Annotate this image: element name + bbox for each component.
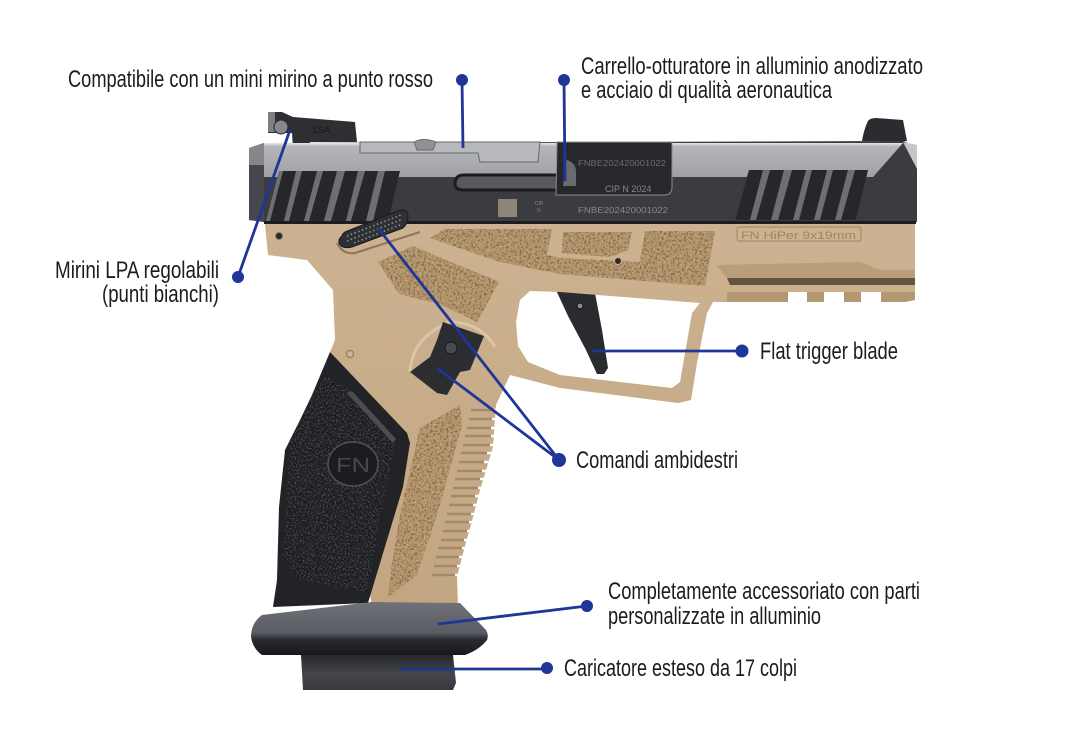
callout: slide <box>558 53 923 181</box>
rear sight: LSA <box>313 125 330 135</box>
rear sight <box>268 112 357 148</box>
callout: accessories: personalizzate in alluminio <box>608 603 821 630</box>
FN logo: FN <box>336 455 370 477</box>
magazine base plate <box>251 602 488 655</box>
slide <box>249 140 917 224</box>
backstrap grip panel <box>273 352 410 607</box>
pistol model marking: FN HiPer 9x19mm <box>741 230 856 242</box>
slide markings <box>498 159 669 217</box>
frame and grip <box>265 224 915 606</box>
callout: slide: e acciaio di qualità aeronautica <box>581 77 832 104</box>
illustration: pistol <box>249 112 917 690</box>
callout: red dot <box>68 66 468 148</box>
front slide serrations <box>735 170 868 220</box>
slide markings: N <box>537 208 541 214</box>
FN logo <box>328 442 378 486</box>
magazine <box>301 655 456 690</box>
callout: accessories <box>438 578 920 630</box>
thumb safety <box>410 322 495 395</box>
callout: sights: (punti bianchi) <box>102 281 219 308</box>
callout: accessories: Completamente accessoriato con parti <box>608 578 920 605</box>
frame rivets <box>276 232 622 264</box>
callout: magazine <box>399 655 797 682</box>
callout: magazine: Caricatore esteso da 17 colpi <box>564 655 797 682</box>
callout: red dot: Compatibile con un mini mirino a punto rosso <box>68 66 433 93</box>
slide markings: CIP <box>535 201 544 207</box>
callout: slide: Carrello-otturatore in alluminio anodizzato <box>581 53 923 80</box>
callout: trigger <box>592 338 898 365</box>
callout: sights <box>55 130 290 308</box>
frame rivet over texture <box>614 258 622 264</box>
callout: ambidextrous controls <box>378 228 738 474</box>
callout: trigger: Flat trigger blade <box>760 338 898 365</box>
slide markings: FNBE202420001022 <box>578 206 669 215</box>
takedown lever <box>337 210 420 253</box>
callout: sights: Mirini LPA regolabili <box>55 257 219 284</box>
pistol model marking <box>737 227 861 242</box>
callout: ambidextrous controls: Comandi ambidestri <box>576 447 738 474</box>
front sight <box>862 118 907 141</box>
slide markings: CIP N 2024 <box>605 184 651 194</box>
frame texture panels <box>378 229 715 597</box>
slide markings: FNBE202420001022 <box>578 159 667 168</box>
trigger <box>556 290 608 374</box>
rear slide serrations <box>266 171 400 221</box>
frontstrap grooves <box>432 410 498 575</box>
